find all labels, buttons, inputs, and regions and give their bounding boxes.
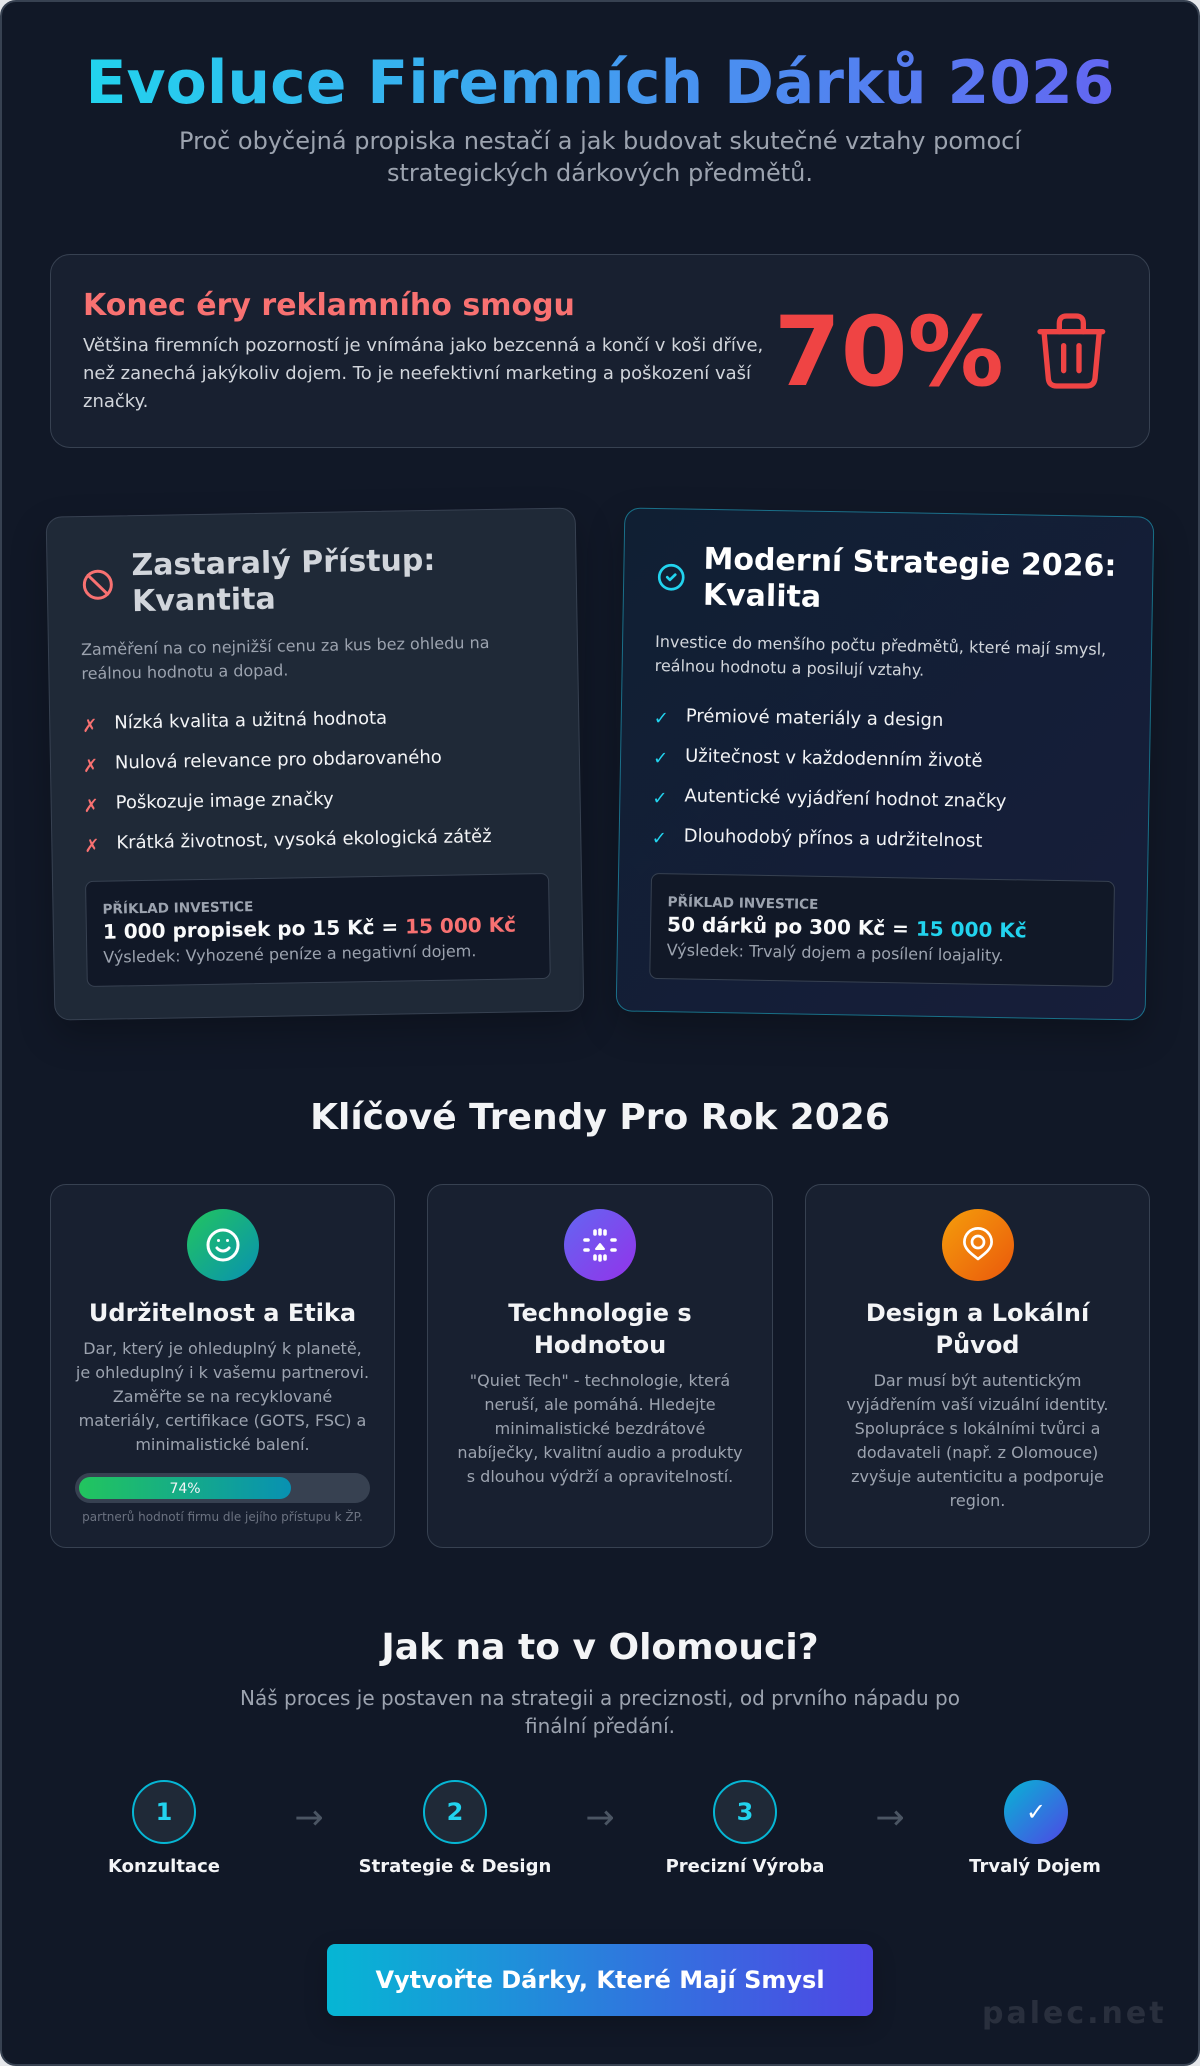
list: drawbacks: Nízká kvalita a užitná hodnota (114, 708, 387, 733)
trend title: Design a Lokální (866, 1299, 1089, 1327)
list: drawbacks: ✗ (84, 836, 100, 857)
panel: local design (805, 1184, 1150, 1548)
description: Investice do menšího počtu předmětů, které mají smysl, (655, 632, 1106, 659)
bar caption: partnerů hodnotí firmu dle jejího přístupu k ŽP. (82, 1510, 363, 1524)
trend text: dodavateli (např. z Olomouce) (857, 1443, 1098, 1462)
trend text: Dar musí být autentickým (874, 1371, 1081, 1390)
trend text: Zaměřte se na recyklované (113, 1387, 332, 1406)
trend text: Spolupráce s lokálními tvůrci a (855, 1419, 1100, 1438)
step 4 circle: ✓ (1026, 1798, 1046, 1826)
icon: ban (82, 570, 113, 600)
panel: modern strategy (616, 507, 1154, 1021)
trend title: Hodnotou (534, 1331, 666, 1359)
list: benefits: Autentické vyjádření hodnot značky (684, 786, 1007, 812)
investment example: 50 dárků po 300 Kč = 15 000 Kč (667, 912, 1027, 942)
investment example: PŘÍKLAD INVESTICE (102, 899, 253, 918)
step 2 (359, 1780, 551, 1877)
heading: Moderní Strategie 2026: (703, 542, 1117, 584)
step 1 label: Konzultace (108, 1856, 220, 1877)
section heading: trends: Klíčové Trendy Pro Rok 2026 (310, 1097, 890, 1138)
step 4 label: Trvalý Dojem (969, 1856, 1101, 1877)
arrow: → (294, 1798, 324, 1838)
arrow: → (585, 1798, 615, 1838)
list: drawbacks: Poškozuje image značky (115, 789, 334, 813)
description: Zaměření na co nejnižší cenu za kus bez ohledu na (81, 633, 490, 659)
trend text: materiály, certifikace (GOTS, FSC) a (79, 1411, 366, 1430)
description: reálnou hodnotu a dopad. (81, 661, 289, 683)
trend text (76, 1339, 369, 1454)
progress bar 74%: 74% (169, 1481, 201, 1497)
arrow: → (875, 1798, 905, 1838)
investment example (85, 873, 551, 987)
subtitle: strategických dárkových předmětů. (387, 159, 813, 187)
list: benefits: ✓ (654, 708, 669, 729)
section intro: Náš proces je postaven na strategii a preciznosti, od prvního nápadu po (240, 1686, 960, 1710)
step 2 label: Strategie & Design (359, 1856, 551, 1877)
icon: check circle (658, 564, 685, 591)
panel body text (83, 335, 763, 412)
trend text: region. (950, 1491, 1005, 1510)
list: drawbacks: ✗ (82, 716, 98, 737)
icon: trash can (1037, 313, 1106, 389)
statistic 70%: 70% (774, 296, 1004, 408)
watermark: palec.net (982, 1996, 1167, 2031)
subtitle (179, 127, 1022, 187)
step 4 (969, 1780, 1101, 1877)
list: benefits: Dlouhodobý přínos a udržitelnost (684, 825, 983, 852)
list: benefits: ✓ (651, 828, 667, 849)
trend title (508, 1299, 692, 1359)
description: reálnou hodnotu a posilují vztahy. (655, 656, 924, 680)
investment example: 1 000 propisek po 15 Kč = 15 000 Kč (103, 913, 516, 944)
subtitle: Proč obyčejná propiska nestačí a jak budovat skutečné vztahy pomocí (179, 127, 1021, 155)
step 2 circle: 2 (447, 1798, 463, 1826)
step 1 circle (132, 1780, 196, 1844)
step 3 (666, 1780, 824, 1877)
trend text: vyjádřením vaší vizuální identity. (846, 1395, 1109, 1414)
list: benefits (651, 706, 1007, 852)
trend text: je ohleduplný i k vašemu partnerovi. (76, 1363, 369, 1382)
investment example (649, 873, 1115, 987)
icon: quiet tech (564, 1209, 636, 1281)
list: benefits: Prémiové materiály a design (686, 706, 944, 731)
step 3 circle: 3 (737, 1798, 753, 1826)
trend title: Původ (936, 1331, 1020, 1359)
trend text: zvyšuje autenticitu a podporuje (851, 1467, 1104, 1486)
heading (703, 542, 1117, 615)
icon: map pin (942, 1209, 1014, 1281)
trend title (866, 1299, 1090, 1359)
investment example: Výsledek: Trvalý dojem a posílení loajality. (667, 940, 1004, 965)
description (81, 633, 490, 683)
list: drawbacks: Nulová relevance pro obdarovaného (115, 747, 442, 773)
trend text: Dar, který je ohleduplný k planetě, (83, 1339, 362, 1358)
section heading: process: Jak na to v Olomouci? (381, 1627, 819, 1668)
panel heading: Konec éry reklamního smogu (83, 288, 575, 323)
panel: sustainability (50, 1184, 395, 1548)
heading: Kvantita (132, 582, 276, 619)
list: drawbacks (82, 708, 492, 857)
trend text: neruší, ale pomáhá. Hledejte (484, 1395, 716, 1414)
trend text: s dlouhou výdrží a opravitelností. (467, 1467, 733, 1486)
step 3 circle (713, 1780, 777, 1844)
panel: end of advertising smog (50, 254, 1150, 448)
trend text: nabíječky, kvalitní audio a produkty (457, 1443, 743, 1462)
progress bar 74% (75, 1473, 370, 1503)
heading (131, 543, 436, 619)
investment example: Výsledek: Vyhozené peníze a negativní dojem. (103, 941, 477, 967)
list: drawbacks: ✗ (83, 756, 98, 777)
heading: Kvalita (703, 578, 821, 615)
description (655, 632, 1106, 680)
trend title: Udržitelnost a Etika (89, 1299, 356, 1327)
panel body text: Většina firemních pozorností je vnímána jako bezcenná a končí v koši dříve, (83, 335, 763, 356)
step 2 circle (423, 1780, 487, 1844)
list: benefits: ✓ (652, 788, 668, 809)
list: benefits: ✓ (653, 748, 668, 769)
trend text: "Quiet Tech" - technologie, která (470, 1371, 730, 1390)
list: drawbacks: ✗ (84, 796, 99, 817)
call to action button: Vytvořte Dárky, Které Mají Smysl (375, 1966, 825, 1994)
step 4 circle (1004, 1780, 1068, 1844)
list: drawbacks: Krátká životnost, vysoká ekologická zátěž (116, 826, 492, 853)
investment example: PŘÍKLAD INVESTICE (667, 894, 819, 913)
trend text: minimalistické balení. (135, 1435, 310, 1454)
icon: smile (187, 1209, 259, 1281)
panel: technology (427, 1184, 773, 1548)
heading: Zastaralý Přístup: (131, 543, 436, 583)
panel body text: než zanechá jakýkoliv dojem. To je neefektivní marketing a poškození vaší (83, 363, 751, 384)
step 3 label: Precizní Výroba (666, 1856, 824, 1877)
trend text (457, 1371, 743, 1486)
trend title: Technologie s (508, 1299, 692, 1327)
panel: outdated approach (46, 507, 584, 1021)
panel body text: značky. (83, 391, 148, 412)
list: benefits: Užitečnost v každodenním životě (685, 746, 983, 772)
trend text: minimalistické bezdrátové (495, 1419, 705, 1438)
section intro (240, 1686, 960, 1738)
step 1 circle: 1 (156, 1798, 172, 1826)
title: Evoluce Firemních Dárků 2026 (86, 48, 1114, 118)
trend text (846, 1371, 1109, 1510)
step 1 (108, 1780, 220, 1877)
call to action button (327, 1944, 873, 2016)
section intro: finální předání. (525, 1714, 675, 1738)
